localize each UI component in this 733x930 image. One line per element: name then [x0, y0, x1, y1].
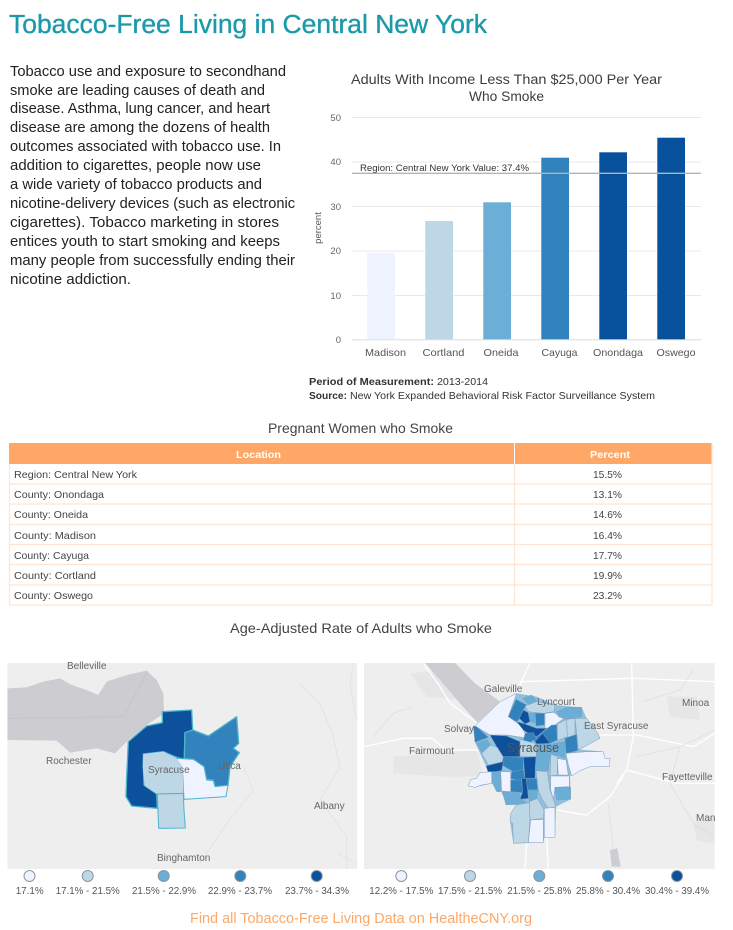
table rows: Region: Central New York [14, 469, 138, 481]
map labels [409, 684, 715, 824]
maps heading: Age-Adjusted Rate of Adults who Smoke [230, 620, 492, 636]
lake [425, 663, 500, 723]
table heading: Pregnant Women who Smoke [268, 420, 453, 436]
category labels: Cayuga [542, 347, 578, 359]
census tract polygons [468, 693, 610, 843]
table rows: 15.5% [593, 469, 622, 481]
y axis labels: 20 [330, 246, 341, 257]
legend: county map: 17.1% - 21.5% [56, 886, 120, 897]
legend: Syracuse map: 12.2% - 17.5% [369, 886, 433, 897]
category labels: Oswego [656, 347, 696, 359]
map labels: Fairmount [409, 746, 454, 757]
map labels: Syracuse [148, 765, 190, 776]
table rows: 16.4% [593, 530, 622, 542]
map labels: Solvay [444, 724, 474, 735]
table: pregnant women who smoke [9, 443, 712, 605]
intro text block: nicotine-delivery devices (such as electronic [10, 196, 295, 212]
map labels: Syracuse [507, 741, 559, 755]
intro text block: disease are among the dozens of health [10, 120, 270, 136]
table rows: County: Cayuga [14, 550, 89, 562]
map labels: Utica [218, 761, 241, 772]
Oswego (dark) [126, 710, 193, 808]
Onondaga [143, 752, 183, 794]
table rows: 23.2% [593, 590, 622, 602]
legend: county map: 23.7% - 34.3% [285, 886, 349, 897]
intro text block: outcomes associated with tobacco use. In [10, 139, 281, 155]
chart title [351, 72, 663, 104]
map labels: Fayetteville [662, 772, 713, 783]
reference line: region value: Region: Central New York Value: 37.4% [360, 163, 530, 174]
map labels: Man [696, 813, 715, 824]
map: counties of Central New York [7, 660, 357, 869]
category labels [365, 347, 696, 359]
table rows: County: Onondaga [14, 489, 104, 501]
chart source note: Source: [309, 390, 347, 402]
map labels: Galeville [484, 684, 523, 695]
category labels: Oneida [484, 347, 519, 359]
intro text block: smoke are leading causes of death and [10, 83, 265, 99]
bars [367, 138, 685, 339]
chart source note [309, 376, 655, 402]
legend: Syracuse map: 30.4% - 39.4% [645, 886, 709, 897]
map labels: Minoa [682, 698, 710, 709]
map labels: Belleville [67, 661, 107, 672]
table rows: County: Madison [14, 530, 96, 542]
table rows [14, 469, 622, 602]
legend: Syracuse map: 17.5% - 21.5% [438, 886, 502, 897]
legend: county map: 22.9% - 23.7% [208, 886, 272, 897]
table rows: 14.6% [593, 509, 622, 521]
y axis labels: 10 [330, 291, 341, 302]
category labels: Cortland [422, 347, 465, 359]
map labels: Lyncourt [537, 697, 575, 708]
Madison [177, 758, 228, 799]
chart title: Adults With Income Less Than $25,000 Per Year [351, 72, 663, 87]
y axis labels: 40 [330, 157, 341, 168]
table rows: 17.7% [593, 550, 622, 562]
footer link: Find all Tobacco-Free Living Data on HealtheCNY.org [190, 911, 532, 927]
Cortland [157, 793, 185, 828]
chart title: Who Smoke [469, 89, 544, 104]
legend: county map: 21.5% - 22.9% [132, 886, 196, 897]
table header [9, 443, 712, 464]
table rows: County: Oswego [14, 590, 93, 602]
intro text block: entices youth to start smoking and keeps [10, 234, 280, 250]
legend: Syracuse map [369, 870, 709, 897]
y axis labels: 30 [330, 202, 341, 213]
chart source note: New York Expanded Behavioral Risk Factor Surveillance System [350, 390, 655, 402]
table header: Location [236, 449, 281, 461]
Oneida [184, 717, 239, 787]
intro text block [10, 64, 295, 288]
category labels: Onondaga [593, 347, 643, 359]
legend: Syracuse map: 25.8% - 30.4% [576, 886, 640, 897]
lake [7, 671, 164, 753]
map labels: Binghamton [157, 853, 210, 864]
legend: county map: 17.1% [16, 886, 44, 897]
map labels: Rochester [46, 756, 92, 767]
chart source note: Period of Measurement: [309, 376, 434, 388]
table rows: 19.9% [593, 570, 622, 582]
table rows: County: Cortland [14, 570, 96, 582]
intro text block: Tobacco use and exposure to secondhand [10, 64, 286, 80]
chart source note: 2013-2014 [437, 376, 488, 388]
intro text block: a wide variety of tobacco products and [10, 177, 262, 193]
legend: county map [16, 870, 349, 897]
table rows: 13.1% [593, 489, 622, 501]
roads [364, 663, 715, 869]
intro text block: many people from successfully ending their [10, 253, 295, 269]
y axis labels: 50 [330, 113, 341, 124]
intro text block: addition to cigarettes, people now use [10, 158, 261, 174]
intro text block: disease. Asthma, lung cancer, and heart [10, 101, 270, 117]
map labels [46, 661, 345, 864]
intro text block: cigarettes). Tobacco marketing in stores [10, 215, 279, 231]
legend: Syracuse map: 21.5% - 25.8% [507, 886, 571, 897]
map: Syracuse census tracts [364, 663, 715, 869]
map labels: Albany [314, 801, 345, 812]
y axis labels: 0 [336, 335, 341, 346]
table rows: County: Oneida [14, 509, 88, 521]
category labels: Madison [365, 347, 406, 359]
title: Tobacco-Free Living in Central New York [9, 11, 487, 39]
intro text block: nicotine addiction. [10, 272, 131, 288]
table header: Percent [590, 449, 631, 461]
map labels: East Syracuse [584, 721, 649, 732]
bar chart: adults with income less than $25,000 who smoke [313, 72, 701, 359]
y axis labels [330, 113, 341, 346]
y axis title: percent [313, 212, 324, 244]
